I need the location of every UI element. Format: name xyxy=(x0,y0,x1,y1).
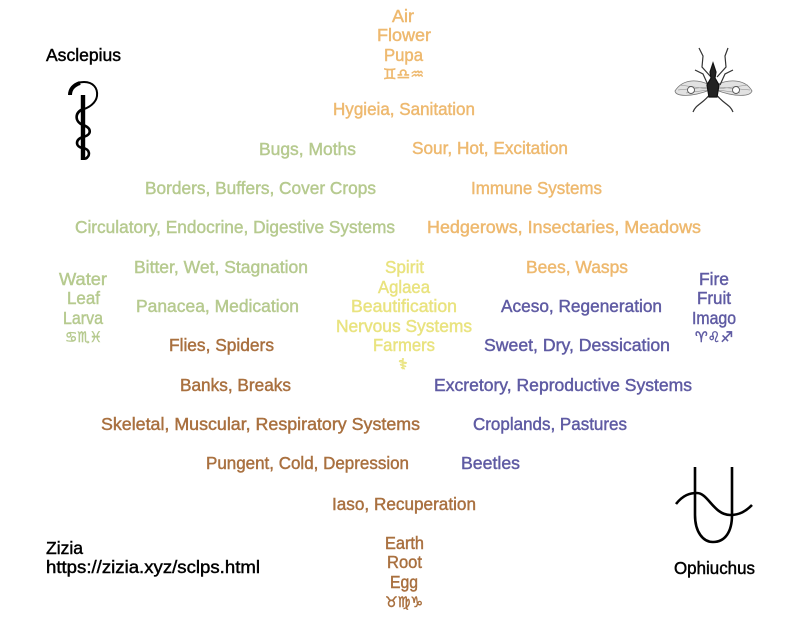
text: Panacea, Medication: Panacea, Medication xyxy=(136,296,299,316)
legs and antennae xyxy=(693,48,733,112)
icon: air zodiac glyphs: ♊︎♎︎♒︎ xyxy=(383,67,424,83)
panel: spirit stack xyxy=(336,257,472,373)
label: Leaf: Leaf xyxy=(67,288,100,308)
panel: earth stack xyxy=(385,533,424,611)
text: Flies, Spiders: Flies, Spiders xyxy=(169,335,274,355)
icon: rod of Asclepius xyxy=(70,82,97,160)
text: Croplands, Pastures: Croplands, Pastures xyxy=(473,414,627,434)
label: Fire: Fire xyxy=(699,269,729,289)
label: Larva: Larva xyxy=(63,308,103,328)
text: Immune Systems: Immune Systems xyxy=(471,178,602,198)
right wing xyxy=(716,81,752,95)
label: Fruit: Fruit xyxy=(697,288,731,308)
label: Pupa: Pupa xyxy=(384,45,423,65)
label: Aglaea: Aglaea xyxy=(378,277,430,297)
label: Beautification: Beautification xyxy=(351,296,457,316)
text: Bees, Wasps: Bees, Wasps xyxy=(526,257,628,277)
text: Skeletal, Muscular, Respiratory Systems: Skeletal, Muscular, Respiratory Systems xyxy=(101,414,420,434)
icon: Ophiuchus symbol xyxy=(676,467,752,542)
label: Spirit: Spirit xyxy=(385,257,424,277)
text: Pungent, Cold, Depression: Pungent, Cold, Depression xyxy=(206,453,409,473)
text: Banks, Breaks: Banks, Breaks xyxy=(180,375,291,395)
body xyxy=(707,63,719,97)
text: Borders, Buffers, Cover Crops: Borders, Buffers, Cover Crops xyxy=(145,178,376,198)
heading: Zizia: Zizia xyxy=(46,538,83,558)
text: Sweet, Dry, Dessication: Sweet, Dry, Dessication xyxy=(484,335,670,355)
label: Imago: Imago xyxy=(692,308,736,328)
text: Bitter, Wet, Stagnation: Bitter, Wet, Stagnation xyxy=(134,257,308,277)
heading: Ophiuchus: Ophiuchus xyxy=(674,558,755,578)
text: Hygieia, Sanitation: Hygieia, Sanitation xyxy=(333,99,475,119)
label: Water: Water xyxy=(59,269,107,289)
label: Flower: Flower xyxy=(377,25,431,45)
link: source url: https://zizia.xyz/sclps.html xyxy=(46,557,260,577)
icon: gall midge xyxy=(675,48,752,112)
text: Excretory, Reproductive Systems: Excretory, Reproductive Systems xyxy=(434,375,692,395)
panel: water stack xyxy=(59,269,107,346)
text: Aceso, Regeneration: Aceso, Regeneration xyxy=(501,296,662,316)
icon: fire zodiac glyphs: ♈︎♌︎♐︎ xyxy=(695,330,733,346)
label: Farmers: Farmers xyxy=(373,335,435,355)
text: Iaso, Recuperation: Iaso, Recuperation xyxy=(332,494,476,514)
label: Egg: Egg xyxy=(390,572,418,592)
label: Root: Root xyxy=(387,552,422,572)
panel: fire stack xyxy=(692,269,736,346)
icon: earth zodiac glyphs: ♉︎♍︎♑︎ xyxy=(385,595,423,611)
text: Beetles: Beetles xyxy=(461,453,520,473)
icon: water zodiac glyphs: ♋︎♏︎♓︎ xyxy=(65,330,102,346)
label: Earth: Earth xyxy=(385,533,424,553)
text: Circulatory, Endocrine, Digestive Systems: Circulatory, Endocrine, Digestive Systems xyxy=(75,217,395,237)
text: Sour, Hot, Excitation: Sour, Hot, Excitation xyxy=(412,138,568,158)
label: Air: Air xyxy=(392,6,414,26)
icon: caduceus glyph: ⚕︎ xyxy=(398,357,408,373)
label: Nervous Systems: Nervous Systems xyxy=(336,316,472,336)
left wing xyxy=(675,81,710,95)
text: Hedgerows, Insectaries, Meadows: Hedgerows, Insectaries, Meadows xyxy=(427,217,701,237)
text: Bugs, Moths: Bugs, Moths xyxy=(259,139,356,159)
heading: Asclepius: Asclepius xyxy=(46,45,121,65)
panel: air stack xyxy=(377,6,431,83)
